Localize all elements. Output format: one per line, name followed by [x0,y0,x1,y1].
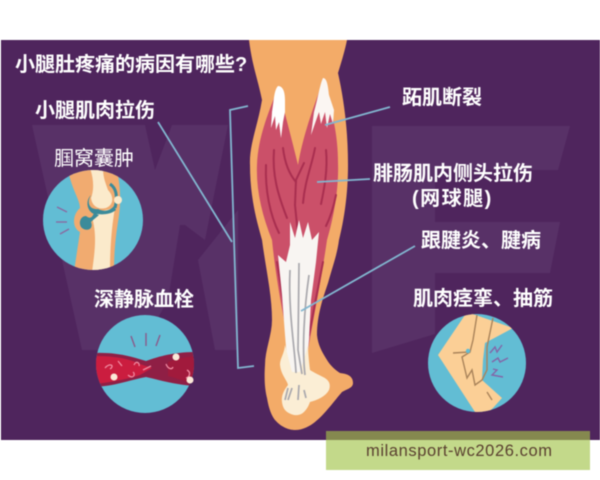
watermark banner [326,431,590,470]
label: deep vein thrombosis: 深静脉血栓 [94,288,194,311]
muscle fibers [266,148,336,335]
label: calf muscle strain: 小腿肌肉拉伤 [35,98,155,122]
pointer: calf strain [158,122,232,242]
label: cramps: 肌肉痉挛、抽筋 [413,286,553,310]
upper tendons [271,86,285,138]
pointer: gastrocnemius [317,179,370,182]
label: popliteal cyst: 腘窝囊肿 [54,147,134,170]
tendon lines [285,263,309,400]
label: plantaris rupture: 跖肌断裂 [402,86,482,109]
pointer: plantaris [325,107,390,125]
pointer: achilles [301,246,415,311]
heel bones [280,345,330,415]
bracket: calf muscle strain [158,106,254,368]
icon: blood vessel [94,315,196,413]
leg [249,40,353,430]
watermark letters [32,125,570,353]
label: tennis leg: (网球腿) [412,187,493,210]
label: achilles tendinitis: 跟腱炎、腱病 [421,229,541,252]
watermark text: milansport-wc2026.com [366,442,552,460]
icon: knee [43,168,143,272]
leg skin [249,40,353,430]
title: 小腿肚疼痛的病因有哪些? [15,52,247,76]
icon: leg cramp [428,312,526,415]
label: gastrocnemius strain: 腓肠肌内侧头拉伤 [373,161,533,185]
calf muscle [257,80,338,350]
achilles tendon [278,220,319,372]
